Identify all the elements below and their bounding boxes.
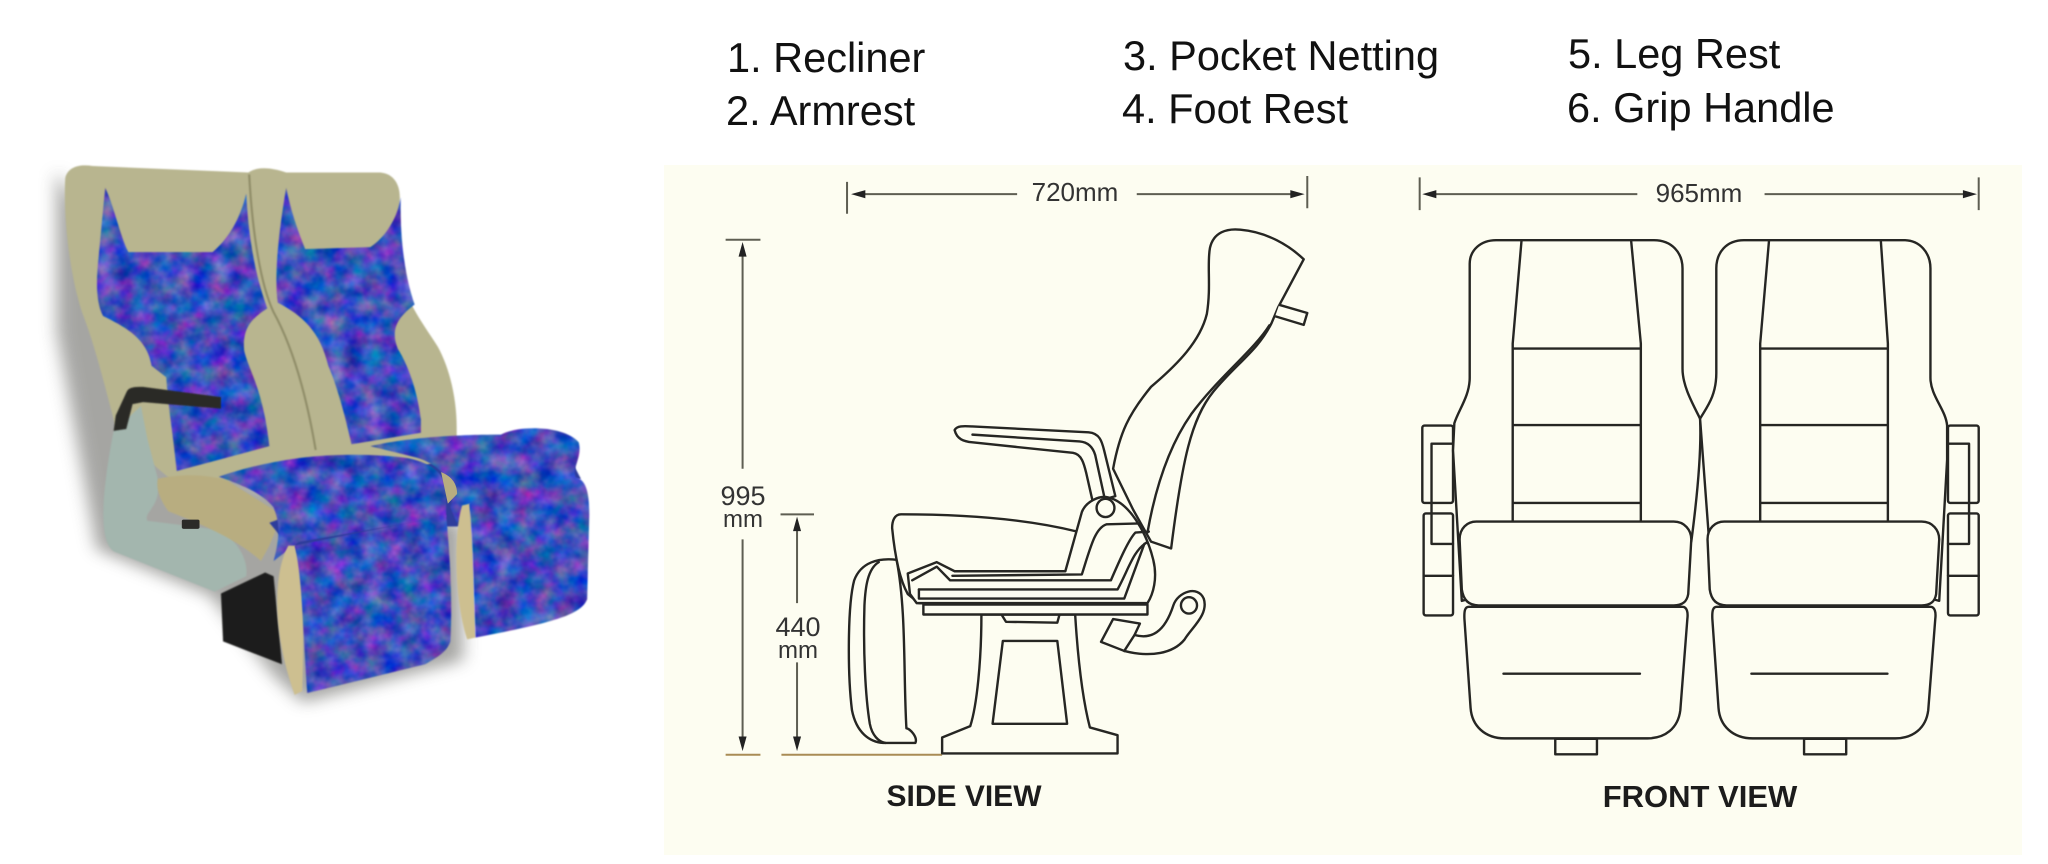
underlay between cushions and leg rests xyxy=(269,446,581,553)
label: leg rest: 5. Leg Rest xyxy=(1568,30,1781,77)
width label 720mm: 720mm xyxy=(1032,177,1118,207)
recline button xyxy=(182,520,200,529)
panel: technical drawings background xyxy=(664,165,2022,855)
seat height label 440 mm: mm xyxy=(778,637,818,664)
right leg rest xyxy=(1712,607,1936,754)
front view drawing xyxy=(1420,177,1979,754)
grip handle lever xyxy=(1101,591,1205,654)
leg rest fabric left xyxy=(295,515,451,693)
seat cushion xyxy=(892,514,1106,603)
armrest xyxy=(114,387,221,431)
leg rest fabric right xyxy=(469,478,589,638)
label: armrest: 2. Armrest xyxy=(726,87,916,134)
dimension: width 720mm lines xyxy=(847,176,1307,214)
seat cushion trim xyxy=(157,475,282,561)
foot rest xyxy=(849,559,916,743)
recliner side housing xyxy=(103,406,247,592)
armrest side xyxy=(955,426,1115,503)
heading: side view: SIDE VIEW xyxy=(886,780,1042,813)
left seat back xyxy=(1453,240,1700,601)
leg rest trim left xyxy=(277,546,303,695)
right seat armrest xyxy=(1948,426,1979,615)
photo: pair of blue upholstered seats xyxy=(57,165,589,703)
right seat back xyxy=(1700,240,1947,601)
dimension: height 995mm lines xyxy=(726,240,760,755)
grip handle on seat back xyxy=(1275,305,1307,325)
height label 995 mm: mm xyxy=(723,506,763,533)
cushion tip trim xyxy=(441,472,457,504)
height label 995 mm: 995 xyxy=(720,481,766,511)
feature list xyxy=(726,30,1835,134)
left seat armrest xyxy=(1422,426,1453,615)
seat divider xyxy=(249,174,316,450)
left leg rest xyxy=(1464,607,1688,754)
black seat base xyxy=(221,572,282,664)
label: recliner: 1. Recliner xyxy=(727,34,926,81)
seat back shells xyxy=(65,165,457,484)
side view drawing xyxy=(726,176,1307,755)
seat cushion fabric right xyxy=(370,428,580,523)
label: foot rest: 4. Foot Rest xyxy=(1122,85,1349,132)
dimension: width 965mm lines xyxy=(1420,177,1979,210)
dimension: seat height 440mm lines xyxy=(781,514,942,755)
seat back xyxy=(1113,229,1304,548)
leg rest trim right xyxy=(456,504,476,639)
label: grip handle: 6. Grip Handle xyxy=(1567,84,1835,131)
heading: front view: FRONT VIEW xyxy=(1603,779,1798,814)
seat back fabric left xyxy=(97,188,269,471)
right seat cushion xyxy=(1708,522,1939,605)
left seat cushion xyxy=(1460,522,1691,605)
photo shadow xyxy=(57,171,463,703)
seat cushion fabric left xyxy=(219,455,446,561)
width label 965mm: 965mm xyxy=(1656,178,1742,208)
label: pocket netting: 3. Pocket Netting xyxy=(1123,32,1439,79)
pedestal xyxy=(942,615,1118,753)
seat height label 440 mm: 440 xyxy=(775,612,821,642)
recliner mechanism xyxy=(908,497,1155,615)
seat back fabric right xyxy=(276,188,421,444)
